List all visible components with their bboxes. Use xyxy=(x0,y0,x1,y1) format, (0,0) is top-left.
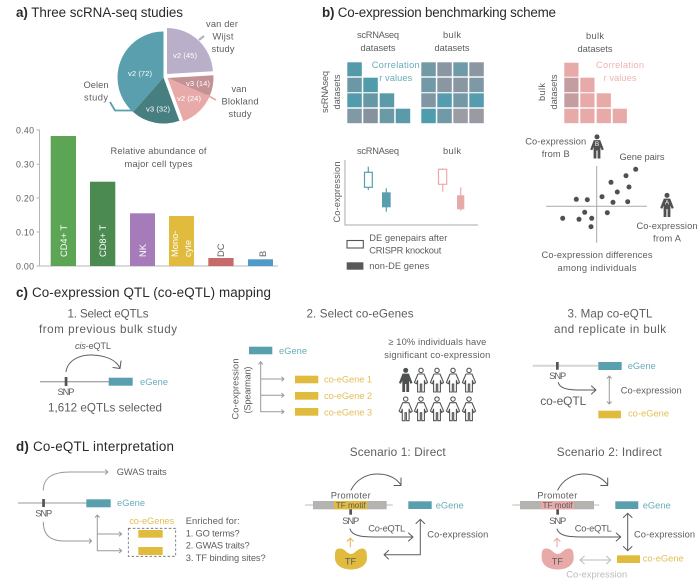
bar chart: cell type abundance: B xyxy=(258,251,268,257)
note: correlation r values teal xyxy=(372,60,420,83)
scenario 2 title: Scenario 2: Indirect xyxy=(557,445,663,459)
boxplot chart: co-expression: scRNAseq xyxy=(357,146,399,156)
note: correlation r values pink xyxy=(596,60,644,83)
row label: bulk datasets xyxy=(537,74,559,110)
pie chart of studies: v2 (72) xyxy=(128,69,152,78)
bar chart: cell type abundance xyxy=(16,126,278,272)
diagram: scenario 1 direct xyxy=(305,474,488,570)
diagram: co-eGene selection: Co-expression xyxy=(230,358,240,420)
column label: scRNAseq datasets: datasets xyxy=(360,43,396,53)
icon: person A: A xyxy=(665,200,670,206)
column label: bulk datasets: bulk xyxy=(443,30,461,40)
row label: scRNAseq datasets xyxy=(320,71,342,113)
icon: person B xyxy=(590,134,604,158)
diagram: map co-eQTL xyxy=(533,361,682,419)
diagram: scenario 2 indirect: Co-expression xyxy=(566,569,627,579)
panel c: co-eQTL mapping xyxy=(16,285,682,421)
co-eGene group xyxy=(128,516,176,556)
icon grid: individuals xyxy=(399,368,476,421)
label: cis-eQTL: cis-eQTL xyxy=(75,341,111,351)
list: enrichment: 1. GO terms? xyxy=(186,528,240,538)
boxplot chart: co-expression xyxy=(332,146,478,225)
diagram: scenario 1 direct: SNP xyxy=(342,516,359,526)
stat: 1,612 eQTLs selected: 1,612 eQTLs selected xyxy=(48,402,162,415)
step 1 title: 1. Select eQTLs xyxy=(68,308,149,321)
row label: bulk datasets: datasets xyxy=(549,74,559,110)
diagram: scenario 1 direct: Promoter xyxy=(331,490,371,500)
heading c: c) Co-expression QTL (co-eQTL) mapping xyxy=(16,285,271,300)
heatmap: scRNAseq vs scRNAseq xyxy=(347,62,410,123)
heatmap: bulk vs bulk xyxy=(564,63,627,123)
bar chart: cell type abundance: CD8+ T xyxy=(98,225,108,257)
panel d: co-eQTL interpretation xyxy=(16,439,695,579)
bar chart: cell type abundance: 0.20 xyxy=(16,194,34,204)
label: Oelen study: Oelen xyxy=(84,80,108,90)
note: correlation r values pink: r values xyxy=(604,73,637,83)
diagram: scenario 2 indirect: eGene xyxy=(643,500,671,510)
list: enrichment: 2. GWAS traits? xyxy=(186,541,250,551)
label: Oelen study: study xyxy=(84,92,108,102)
bar chart: cell type abundance: 0.40 xyxy=(16,126,34,136)
diagram: co-eGene selection: (Spearman) xyxy=(243,366,253,414)
legend: DE genepairs: CRISPR knockout xyxy=(369,245,442,255)
panel a: three scRNA-seq studies xyxy=(16,5,278,272)
diagram: SNP to eGene xyxy=(40,355,168,397)
diagram: scenario 2 indirect: TF xyxy=(552,556,563,566)
bar chart: cell type abundance: DC xyxy=(216,243,226,257)
column label: bulk datasets xyxy=(434,30,470,53)
step 3 title: 3. Map co-eQTL xyxy=(568,307,653,320)
row label: bulk datasets: bulk xyxy=(537,83,547,101)
diagram: map co-eQTL: eGene xyxy=(628,361,656,371)
label: co-expression from A: Co-expression xyxy=(636,221,698,231)
pie chart of studies: v3 (14) xyxy=(186,79,210,88)
diagram: scenario 2 indirect: TF motif xyxy=(542,501,573,510)
column label: bulk datasets right: bulk xyxy=(586,31,604,41)
label: van der Wijst study: Wijst xyxy=(212,32,234,42)
bar chart: cell type abundance: CD4+ T xyxy=(59,225,69,257)
diagram: map co-eQTL: SNP xyxy=(549,371,566,381)
boxplot chart: co-expression: Co-expression xyxy=(332,162,342,222)
column label: bulk datasets right xyxy=(578,31,613,54)
diagram: scenario 2 indirect: Co-expression xyxy=(634,530,695,540)
diagram: scenario 1 direct: Co-eQTL xyxy=(368,524,405,534)
list: enrichment: 3. TF binding sites? xyxy=(186,553,266,563)
scatter plot: gene pairs xyxy=(546,166,647,243)
row label: scRNAseq datasets: datasets xyxy=(332,74,342,110)
bar chart: cell type abundance: 0.30 xyxy=(16,160,34,170)
legend: DE genepairs: DE genepairs after xyxy=(369,233,447,243)
column label: scRNAseq datasets xyxy=(357,30,399,53)
diagram: scenario 2 indirect: Co-eQTL xyxy=(575,524,612,534)
diagram: scenario 2 indirect xyxy=(512,474,695,579)
diagram: scenario 1 direct: Co-expression xyxy=(427,530,488,540)
pie chart of studies: v2 (45) xyxy=(173,51,197,60)
diagram: map co-eQTL: co-eGene xyxy=(628,409,669,419)
step 2 title: 2. Select co-eGenes xyxy=(306,308,414,321)
label: van der Wijst study: study xyxy=(212,44,235,54)
label: co-expression from A xyxy=(636,221,698,244)
diagram: co-eGene selection: eGene xyxy=(279,346,307,356)
diagram: SNP effects: eGene xyxy=(117,498,145,508)
diagram: co-eGene selection: co-eGene 1 xyxy=(324,375,372,385)
note: 10% individuals: ≥ 10% individuals have xyxy=(388,337,486,347)
list: enrichment: Enriched for: xyxy=(186,516,240,526)
label: co-expression from A: from A xyxy=(653,234,682,244)
label: co-expression from B: from B xyxy=(542,149,570,159)
column label: scRNAseq datasets: scRNAseq xyxy=(357,30,399,40)
diagram: scenario 2 indirect: co-eGene xyxy=(643,554,684,564)
pie chart of studies xyxy=(110,28,216,124)
panel b: co-expression benchmarking scheme xyxy=(320,5,698,273)
diagram: co-eGene selection: co-eGene 3 xyxy=(324,408,372,418)
icon: person A xyxy=(660,193,674,217)
diagram: SNP effects: GWAS traits xyxy=(117,467,167,477)
diagram: scenario 1 direct: TF motif xyxy=(336,501,366,510)
note: correlation r values teal: Correlation xyxy=(372,60,420,70)
diagram: co-eGene selection: co-eGene 2 xyxy=(324,391,372,401)
label: van der Wijst study: van der xyxy=(206,19,238,29)
bar chart: cell type abundance: 0.00 xyxy=(16,262,34,272)
diagram: co-eGene selection xyxy=(230,346,372,420)
bar chart: cell type abundance: Mono- xyxy=(170,231,180,257)
co-eGene group: co-eGenes xyxy=(129,516,175,526)
label: van Blokland study: study xyxy=(228,109,252,119)
note: 10% individuals xyxy=(384,337,490,360)
label: van Blokland study: Blokland xyxy=(222,96,258,106)
label: co-expression from B xyxy=(525,137,586,159)
pie chart of studies: v2 (24) xyxy=(177,94,201,103)
diagram: SNP effects xyxy=(18,467,167,553)
heading d: d) Co-eQTL interpretation xyxy=(16,439,174,454)
diagram: SNP to eGene: SNP xyxy=(58,387,74,397)
heading b: b) Co-expression benchmarking scheme xyxy=(322,5,556,20)
step 3 title: and replicate in bulk xyxy=(554,323,666,336)
legend: DE genepairs xyxy=(347,233,447,255)
heatmap: scRNAseq vs bulk xyxy=(421,62,484,123)
step 1 title: from previous bulk study xyxy=(39,323,177,336)
chart note: relative abundance: Relative abundance of xyxy=(110,146,207,156)
icon: person B: B xyxy=(595,141,599,148)
caption: co-expression differences xyxy=(542,250,653,273)
pie chart of studies: v3 (32) xyxy=(146,104,170,114)
label: gene pairs: Gene pairs xyxy=(620,152,665,162)
chart note: relative abundance: major cell types xyxy=(124,159,193,169)
note: correlation r values pink: Correlation xyxy=(596,60,644,70)
label: Oelen study xyxy=(84,80,108,102)
chart note: relative abundance xyxy=(110,146,207,169)
bar chart: cell type abundance: 0.10 xyxy=(16,228,34,238)
column label: bulk datasets right: datasets xyxy=(578,44,613,54)
diagram: scenario 2 indirect: Promoter xyxy=(537,490,577,500)
step 3 title xyxy=(554,307,666,336)
row label: scRNAseq datasets: scRNAseq xyxy=(320,71,330,113)
step 1 title xyxy=(39,308,177,336)
list: enrichment xyxy=(186,516,266,563)
diagram: SNP to eGene: eGene xyxy=(140,377,168,387)
caption: co-expression differences: Co-expression differences xyxy=(542,250,653,260)
diagram: map co-eQTL: Co-expression xyxy=(621,385,682,395)
column label: bulk datasets: datasets xyxy=(434,43,470,53)
label: co-expression from B: Co-expression xyxy=(525,137,586,147)
boxplot chart: co-expression: bulk xyxy=(443,146,461,156)
label: van Blokland study xyxy=(222,84,258,119)
note: correlation r values teal: r values xyxy=(379,73,413,83)
bar chart: cell type abundance: cyte xyxy=(183,240,193,257)
caption: co-expression differences: among individuals xyxy=(558,263,637,273)
bar chart: cell type abundance: NK xyxy=(138,243,148,257)
label: van Blokland study: van xyxy=(232,84,246,94)
diagram: scenario 1 direct: eGene xyxy=(436,500,464,510)
heading a: a) Three scRNA-seq studies xyxy=(16,5,183,20)
note: 10% individuals: significant co-expression xyxy=(384,350,490,360)
legend: non-DE genes: non-DE genes xyxy=(369,261,430,271)
label: van der Wijst study xyxy=(206,19,238,54)
diagram: map co-eQTL: co-eQTL xyxy=(540,394,587,408)
scenario 1 title: Scenario 1: Direct xyxy=(350,445,446,459)
diagram: scenario 2 indirect: SNP xyxy=(549,516,566,526)
diagram: SNP effects: SNP xyxy=(35,509,52,519)
diagram: scenario 1 direct: TF xyxy=(345,556,356,566)
